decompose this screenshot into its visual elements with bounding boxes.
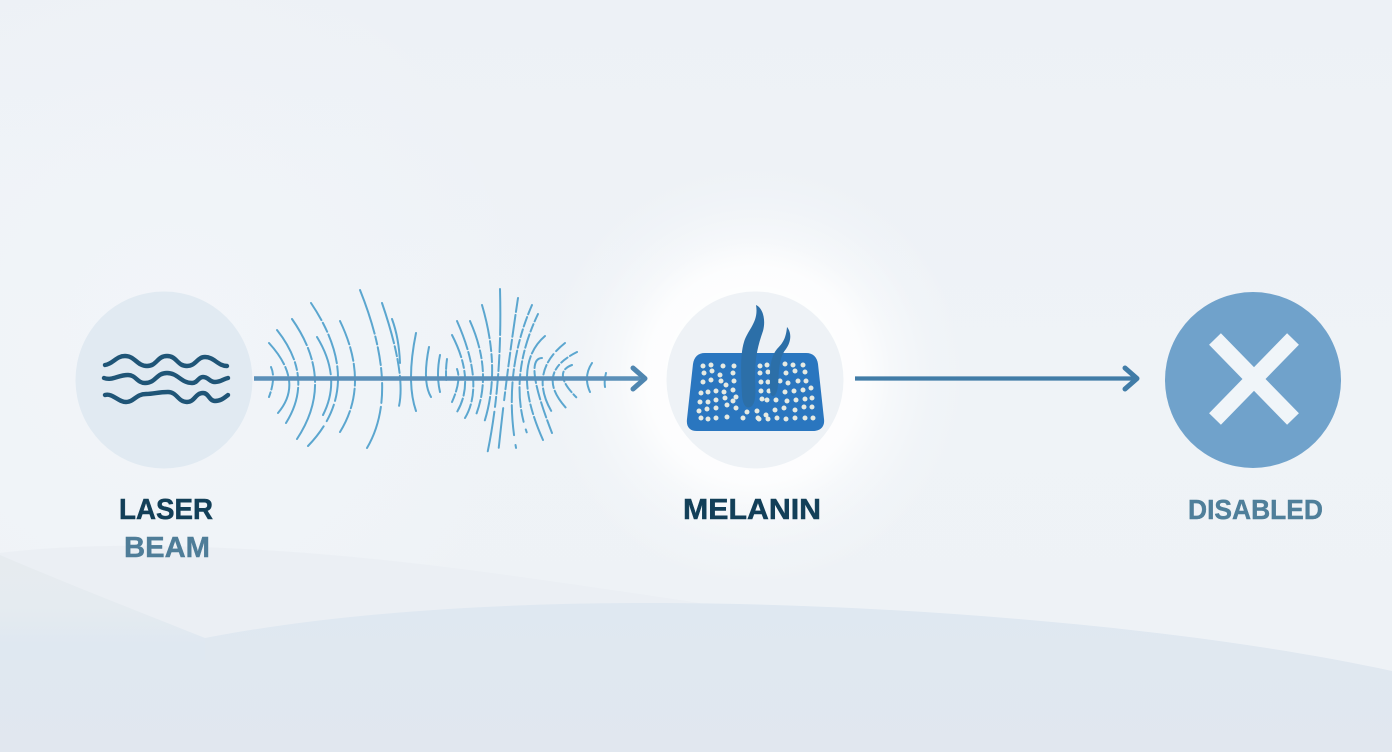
label: LASER BEAM: BEAM — [124, 532, 210, 564]
laser beam step — [76, 292, 252, 564]
skin block — [687, 353, 824, 431]
icon: X mark — [1215, 339, 1293, 419]
circle: disabled icon backdrop — [1165, 292, 1341, 468]
label: MELANIN: MELANIN — [683, 494, 821, 526]
label: LASER BEAM: LASER — [119, 494, 213, 526]
laser wave pattern — [269, 289, 606, 455]
arrow: laser to melanin — [254, 368, 645, 389]
icon: skin block with melanin dots and hair — [687, 305, 824, 431]
disabled step — [1165, 292, 1341, 525]
melanin dots — [699, 364, 813, 419]
melanin step — [666, 292, 844, 526]
arrow: melanin to disabled — [855, 368, 1137, 389]
circle: laser beam icon backdrop — [76, 292, 252, 468]
label: DISABLED: DISABLED — [1188, 494, 1323, 525]
hair strands — [741, 305, 764, 408]
circle: melanin icon backdrop — [666, 292, 844, 468]
label: LASER BEAM — [119, 494, 213, 564]
icon: three waves — [104, 356, 228, 402]
